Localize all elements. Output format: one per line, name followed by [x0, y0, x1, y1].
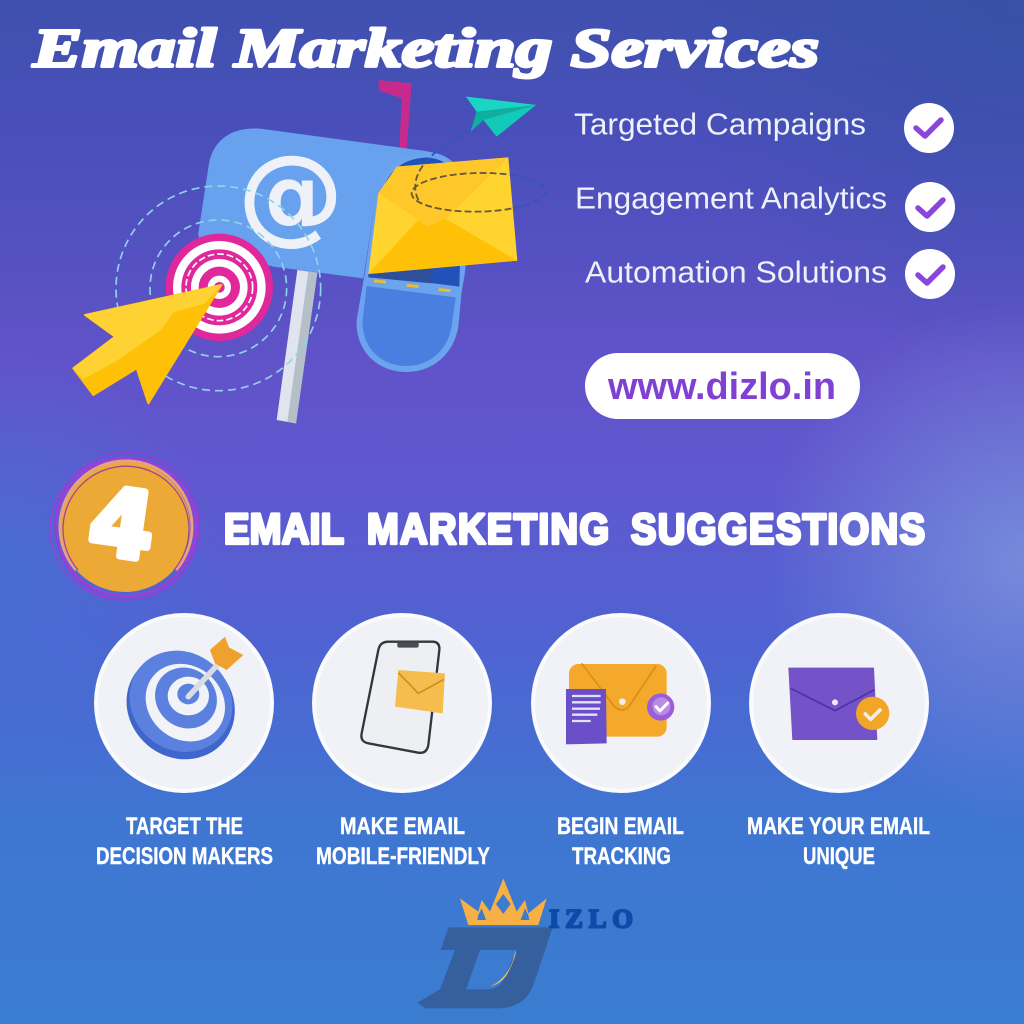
- illustration: mailbox with target and cursor: [73, 80, 545, 423]
- mailbox flag: [378, 80, 412, 149]
- logo letter D: [417, 927, 553, 1008]
- caption: MOBILE-FRIENDLY: [316, 843, 490, 870]
- number badge: 4: [83, 467, 161, 582]
- item: automation solutions: [585, 249, 955, 299]
- section heading: MARKETING: [367, 504, 609, 553]
- dashed flight path: [411, 129, 545, 213]
- section heading: [224, 504, 925, 553]
- item: targeted campaigns: Targeted Campaigns: [574, 106, 866, 142]
- caption: MAKE YOUR EMAIL: [747, 813, 930, 840]
- item: targeted campaigns: [574, 103, 954, 153]
- caption: MAKE EMAIL: [340, 813, 465, 840]
- number badge: [50, 452, 199, 600]
- logo swoosh: [490, 951, 516, 987]
- section heading: EMAIL: [224, 504, 344, 553]
- card: tracking: [531, 613, 711, 870]
- item: automation solutions: Automation Solutions: [585, 254, 887, 290]
- caption: TARGET THE: [126, 813, 243, 840]
- suggestion circles: [94, 613, 930, 870]
- caption: [96, 813, 273, 870]
- card: target: [94, 613, 274, 870]
- card: mobile: [312, 613, 492, 870]
- website pill: www.dizlo.in: [607, 366, 836, 408]
- mailbox opening: [364, 152, 467, 293]
- logo wordmark: IZLO: [549, 904, 633, 934]
- caption: BEGIN EMAIL: [557, 813, 684, 840]
- logo: [417, 878, 633, 1008]
- website pill: [585, 353, 860, 419]
- checklist: [574, 103, 955, 299]
- item: engagement analytics: Engagement Analytics: [575, 180, 887, 216]
- mailbox lower door: [357, 277, 462, 372]
- caption: [557, 813, 684, 870]
- dashed orbit circles: [116, 186, 321, 391]
- title: Email Marketing Services: [32, 18, 819, 78]
- mailbox body: [198, 128, 430, 278]
- logo crown: [460, 878, 547, 925]
- at symbol: @: [238, 133, 344, 256]
- mailbox post: [277, 270, 317, 423]
- caption: TRACKING: [572, 843, 671, 870]
- item: engagement analytics: [575, 180, 955, 232]
- caption: [316, 813, 490, 870]
- envelope: [368, 157, 517, 274]
- door latch marks: [374, 279, 451, 292]
- icon: purple envelope: [788, 668, 889, 740]
- caption: DECISION MAKERS: [96, 843, 273, 870]
- icon: dartboard: [105, 630, 257, 781]
- cursor arrow: [73, 285, 221, 403]
- paper plane: [466, 97, 536, 137]
- card: unique: [747, 613, 930, 870]
- target: [166, 234, 273, 341]
- icon: phone with envelope: [361, 642, 445, 753]
- icon: envelope with document: [566, 663, 674, 744]
- section heading: SUGGESTIONS: [631, 504, 925, 553]
- caption: [747, 813, 930, 870]
- caption: UNIQUE: [803, 843, 875, 870]
